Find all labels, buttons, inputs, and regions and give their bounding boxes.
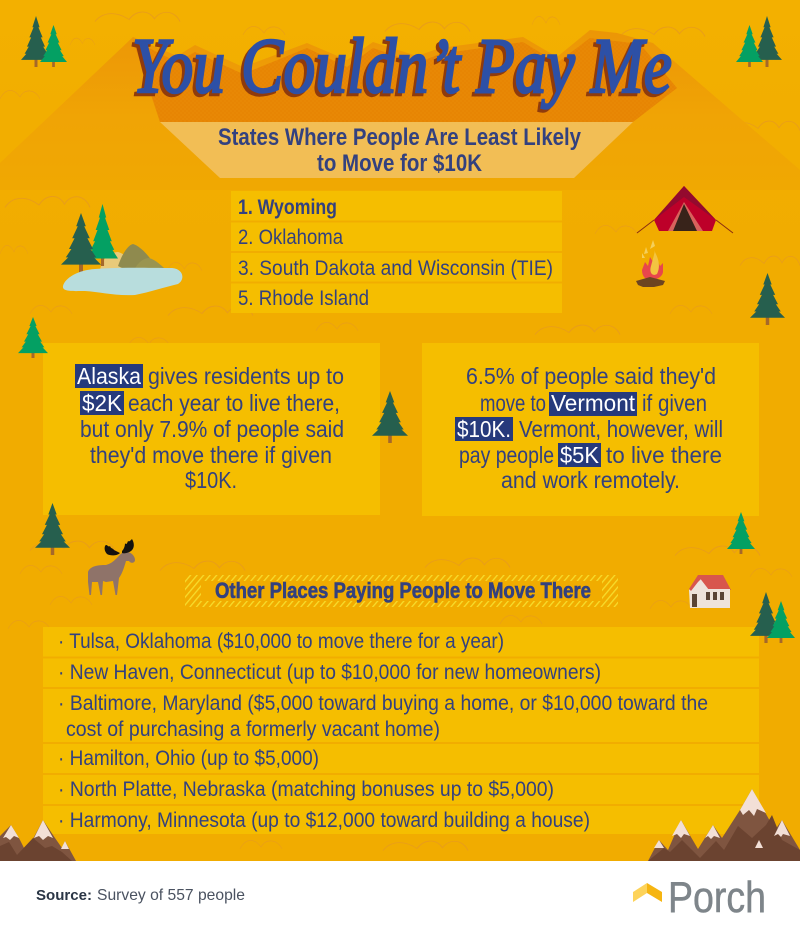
icon: trees top left: [21, 16, 67, 67]
panel: Vermont: 6.5% of people said they'd: [466, 363, 716, 389]
panel: Vermont: $10K.: [457, 416, 511, 442]
source note: Survey of 557 people: [97, 887, 245, 904]
panel: places list: · North Platte, Nebraska (matching bonuses up to $5,000): [58, 778, 554, 801]
heading: other places: Other Places Paying People to Move There: [215, 578, 591, 603]
panel: places list: · Hamilton, Ohio (up to $5,000): [58, 747, 319, 770]
logo: Porch: Porch: [668, 873, 766, 922]
icon: mountains left: [0, 820, 76, 861]
panel: Vermont: move to: [480, 390, 546, 416]
icon: campfire: [636, 240, 665, 287]
panel: Vermont: and work remotely.: [501, 467, 680, 493]
title mountains: [0, 30, 800, 190]
panel: state ranking list: 1. Wyoming: [238, 196, 337, 219]
panel: Vermont: Vermont: [551, 390, 636, 416]
panel: Vermont: to live there: [606, 442, 722, 468]
panel: Vermont: Vermont, however, will: [519, 416, 723, 442]
title: You Couldn’t Pay Me: [132, 22, 672, 109]
panel: Alaska: they'd move there if given: [90, 442, 332, 468]
panel: state ranking list: 2. Oklahoma: [238, 226, 343, 249]
icon: tree lower right: [727, 512, 755, 554]
icon: tent: [637, 186, 733, 233]
panel: places list: · Baltimore, Maryland ($5,000 toward buying a home, or $10,000 toward the: [58, 692, 708, 715]
subtitle banner: States Where People Are Least Likely: [218, 124, 582, 151]
icon: trees by places list: [750, 592, 795, 643]
subtitle banner: to Move for $10K: [317, 150, 483, 177]
icon: tree right of list: [750, 273, 785, 325]
source note: Source:: [36, 887, 92, 904]
panel: places list: [43, 627, 759, 834]
icon: trees top right: [736, 16, 782, 67]
panel: places list: · Harmony, Minnesota (up to $12,000 toward building a house): [58, 809, 590, 832]
icon: tree lower left: [35, 503, 70, 555]
icon: mountains right: [648, 789, 800, 861]
panel: Alaska: but only 7.9% of people said: [80, 416, 344, 442]
panel: state ranking list: [231, 191, 562, 313]
logo: Porch: [633, 873, 766, 922]
panel: Alaska: gives residents up to: [148, 363, 344, 389]
panel: places list: · New Haven, Connecticut (up to $10,000 for new homeowners): [58, 661, 601, 684]
panel: Alaska: $2K: [82, 390, 123, 416]
source note: [36, 887, 245, 904]
panel: state ranking list: 5. Rhode Island: [238, 287, 369, 310]
title: You Couldn’t Pay Me: [129, 25, 669, 112]
icon: house: [689, 575, 731, 608]
panel: Vermont: [422, 343, 759, 516]
panel: places list: cost of purchasing a formerly vacant home): [66, 718, 440, 741]
icon: tree between panels: [372, 391, 408, 443]
icon: lake with trees and hills: [61, 204, 182, 295]
panel: state ranking list: 3. South Dakota and Wisconsin (TIE): [238, 257, 553, 280]
panel: Vermont: $5K: [560, 442, 600, 468]
panel: places list: · Tulsa, Oklahoma ($10,000 to move there for a year): [58, 630, 504, 653]
panel: Alaska: [43, 343, 380, 515]
panel: Alaska: $10K.: [185, 467, 237, 493]
heading: other places: [185, 575, 618, 607]
icon: moose: [88, 539, 135, 595]
panel: Vermont: pay people: [459, 442, 554, 468]
panel: Alaska: Alaska: [77, 363, 141, 389]
footer: [0, 861, 800, 930]
icon: tree left of panel: [18, 317, 48, 358]
panel: Vermont: if given: [642, 390, 707, 416]
panel: Alaska: each year to live there,: [128, 390, 340, 416]
subtitle banner: [160, 122, 633, 178]
